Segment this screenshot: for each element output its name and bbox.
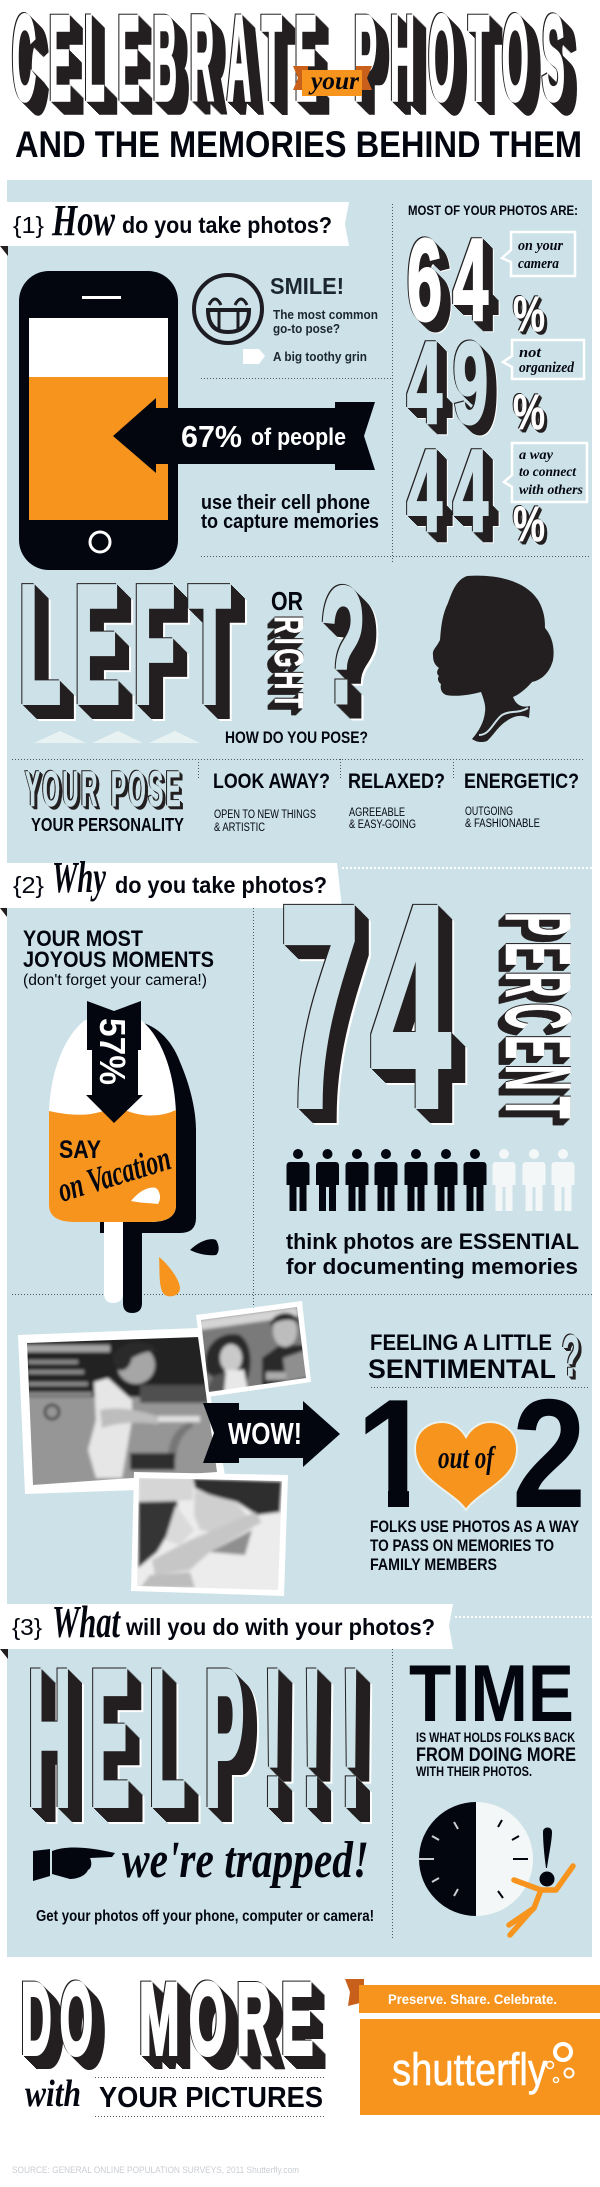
heading: your pose your personality: YOUR PERSONALITY: [31, 815, 184, 835]
text: how do you pose: HOW DO YOU POSE?: [225, 728, 368, 747]
arrow: wow: [203, 1401, 340, 1467]
photo: child on tricycle: [18, 1328, 230, 1494]
stat: 44 percent a way to connect: with others: [519, 483, 584, 498]
banner: what will you do with your photos: [0, 1596, 592, 1659]
icon: smiley: [194, 275, 262, 343]
text: smile: SMILE!: [270, 273, 344, 299]
column: look away: & ARTISTIC: [214, 822, 265, 834]
arrow: 67 percent of people: of people: [251, 424, 346, 451]
banner: why do you take photos: [0, 853, 592, 917]
icon: pointing hand: [33, 1847, 115, 1881]
footer: do more with your pictures: [21, 1962, 326, 2116]
heading: left or right: RIGHT: [266, 616, 312, 712]
column: relaxed: & EASY-GOING: [349, 819, 416, 831]
stat: 44 percent a way to connect: to connect: [519, 465, 577, 480]
text: with your pictures: [25, 2073, 326, 2116]
arrow: wow: WOW!: [228, 1416, 302, 1451]
stat: 64 percent on your camera: camera: [518, 256, 559, 272]
heading: feeling a little sentimental: FEELING A LITTLE: [370, 1330, 552, 1355]
column: energetic: & FASHIONABLE: [465, 818, 540, 830]
banner: how do you take photos: {1}: [13, 212, 44, 238]
logo: shutterfly: shutterfly: [392, 2044, 547, 2095]
column: look away: LOOK AWAY?: [213, 770, 330, 793]
text: your most joyous moments: (don't forget your camera!): [23, 972, 207, 989]
column: look away: OPEN TO NEW THINGS: [214, 809, 316, 821]
panel: section 2 why: PERCENT: [486, 912, 591, 1124]
heading: do more: DO: [21, 1962, 101, 2076]
icon: popsicle 57 percent: SAY: [59, 1136, 101, 1164]
panel: light blue background: [7, 180, 592, 1957]
icon: phone with 67 percent fill: [19, 271, 178, 570]
panel: section 1 how: ?: [320, 553, 366, 739]
heading: time: FROM DOING MORE: [416, 1745, 576, 1766]
text: use their cell phone: [201, 492, 379, 533]
text: think photos are essential: for documenting memories: [286, 1254, 578, 1279]
banner: why do you take photos: do you take photos?: [115, 872, 327, 898]
heading: left or right: LEFT: [19, 552, 244, 738]
text: with your pictures: with: [25, 2073, 81, 2115]
column: relaxed: [348, 770, 445, 831]
heading: do more: [21, 1962, 323, 2076]
banner: how do you take photos: do you take photos?: [122, 212, 332, 238]
panel: section 2 why: [0, 848, 592, 1596]
heading: left or right: [19, 552, 366, 739]
heading: feeling a little sentimental: SENTIMENTAL: [368, 1354, 556, 1384]
text: your most joyous moments: YOUR MOST: [23, 926, 143, 951]
ribbon: your: [293, 66, 372, 96]
text: your most joyous moments: [23, 926, 214, 989]
heading: time: WITH THEIR PHOTOS.: [416, 1763, 532, 1779]
ribbon: your: your: [308, 68, 359, 95]
panel: section 1 how: YOUR POSE: [25, 761, 183, 817]
text: smile: go-to pose?: [273, 321, 340, 336]
text: use their cell phone: to capture memories: [201, 511, 379, 533]
heading: time: [409, 1649, 576, 1779]
panel: section 3 what: [0, 1596, 592, 1940]
icon: woman silhouette: [433, 576, 554, 742]
stat: 44 percent a way to connect: 44: [407, 426, 499, 556]
text: folks use photos: FAMILY MEMBERS: [370, 1556, 497, 1574]
text: smile: A big toothy grin: [273, 349, 367, 364]
text: think photos are essential: think photos are ESSENTIAL: [286, 1229, 579, 1254]
column: energetic: ENERGETIC?: [464, 770, 579, 793]
banner: what will you do with your photos: will you do with your photos?: [125, 1614, 435, 1640]
chart: people pictogram 74 percent: [286, 1149, 574, 1211]
text: your most joyous moments: JOYOUS MOMENTS: [23, 947, 214, 972]
column: relaxed: AGREEABLE: [349, 807, 405, 819]
column: energetic: [464, 770, 579, 830]
stat: 49 percent not organized: not: [519, 345, 542, 361]
icon: popsicle 57 percent: on Vacation: [53, 1138, 175, 1210]
arrow: 67 percent of people: [113, 398, 375, 473]
logo: shutterfly: Preserve. Share. Celebrate.: [388, 1992, 557, 2007]
stat: 64 percent on your camera: on your: [518, 238, 563, 254]
stat: 1 out of 2: [356, 1367, 586, 1540]
title: [12, 0, 582, 165]
stat: 1 out of 2: 1: [356, 1367, 433, 1540]
text: use their cell phone: use their cell phone: [201, 492, 370, 514]
column: look away: [213, 770, 330, 834]
stat: 49 percent not organized: organized: [519, 360, 574, 376]
banner: why do you take photos: {2}: [13, 872, 44, 898]
icon: clock with falling figure: [418, 1802, 573, 1935]
banner: what will you do with your photos: What: [52, 1596, 121, 1647]
text: smile: [243, 273, 378, 364]
heading: time: TIME: [409, 1649, 574, 1739]
stat: 49 percent not organized: 49: [407, 318, 499, 448]
stat: 49 percent not organized: %: [513, 384, 545, 440]
stat: 64 percent on your camera: 64: [407, 215, 499, 345]
stat: 44 percent a way to connect: %: [513, 496, 545, 552]
source note: SOURCE: GENERAL ONLINE POPULATION SURVEYS, 2011 Shutterfly.com: [12, 2165, 299, 2175]
icon: heart: [415, 1422, 517, 1510]
text: smile: The most common: [273, 307, 378, 322]
column: energetic: OUTGOING: [465, 806, 513, 818]
column: relaxed: RELAXED?: [348, 770, 445, 793]
icon: popsicle 57 percent: 57%: [92, 1018, 133, 1085]
text: MORE: [139, 1962, 323, 2076]
arrow: 67 percent of people: 67%: [181, 419, 242, 454]
stat: 1 out of 2: 2: [512, 1367, 586, 1540]
text: folks use photos: TO PASS ON MEMORIES TO: [370, 1537, 554, 1555]
banner: how do you take photos: [0, 196, 349, 256]
banner: how do you take photos: How: [51, 196, 115, 245]
logo: shutterfly: [345, 1979, 600, 2115]
heading: left or right: OR: [271, 586, 303, 616]
photo: couple: [196, 1301, 313, 1397]
text: think photos are essential: [286, 1229, 579, 1279]
banner: why do you take photos: Why: [52, 853, 106, 902]
icon: popsicle 57 percent: [49, 1001, 219, 1313]
banner: what will you do with your photos: {3}: [12, 1614, 42, 1640]
heading: feeling a little sentimental: ?: [562, 1324, 580, 1389]
icon: pose triangles: [34, 731, 200, 743]
text: folks use photos: [370, 1518, 579, 1574]
text: get your photos off: Get your photos off your phone, computer or camera!: [36, 1908, 374, 1925]
panel: section 1 how: [0, 196, 590, 835]
stat: 64 percent on your camera: %: [513, 286, 545, 342]
text: with your pictures: YOUR PICTURES: [99, 2082, 323, 2114]
text: we're trapped: we're trapped!: [122, 1832, 369, 1889]
stat: 1 out of 2: out of: [438, 1439, 496, 1475]
heading: your pose your personality: [25, 761, 184, 835]
stat: 44 percent a way to connect: a way: [519, 448, 554, 463]
photo: father and child: [131, 1472, 288, 1596]
heading: feeling a little sentimental: [368, 1324, 590, 1389]
